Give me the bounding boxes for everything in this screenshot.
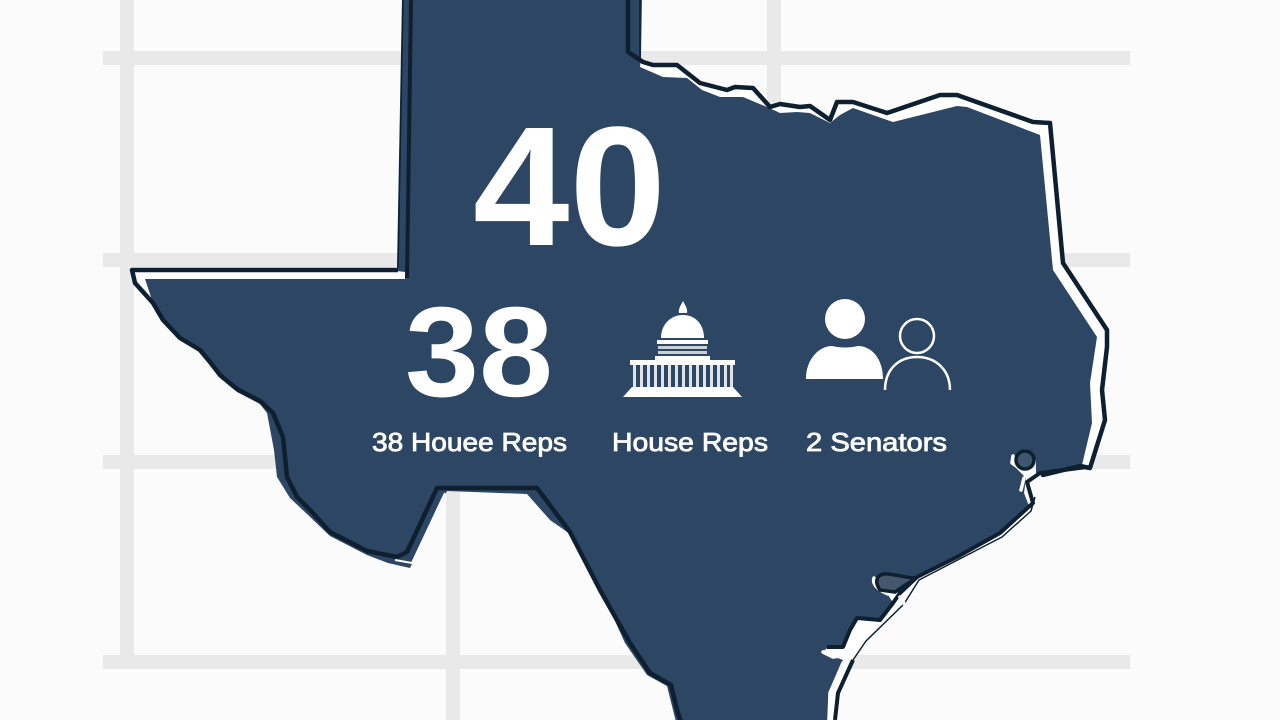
black border: panhandle east inner line <box>639 0 641 60</box>
black border: panhandle west lines <box>398 0 403 268</box>
label: House reps: House Reps <box>612 427 768 457</box>
black border: north and east <box>628 0 1107 475</box>
outlined senator <box>885 319 950 390</box>
black border: panhandle base and southwest <box>132 270 681 720</box>
filled senator <box>806 299 883 379</box>
black border: panhandle west thick line <box>407 0 411 278</box>
stat number: 38: 38 <box>405 281 553 424</box>
map: Texas silhouette <box>132 0 1107 720</box>
headline number: 40: 40 <box>473 92 666 282</box>
state fill <box>145 0 1097 720</box>
coast: Corpus Christi Bay loop <box>877 574 916 592</box>
coast: white highlights <box>823 456 1024 720</box>
white line: Big Bend <box>395 493 445 563</box>
coast: Galveston Bay loop <box>1016 451 1034 469</box>
coast: black shoreline <box>827 467 1087 720</box>
label: 38 House reps: 38 Houee Reps <box>372 427 567 457</box>
white offset band along borders <box>137 60 1107 720</box>
icon: two senators <box>806 299 950 390</box>
icon: capitol building <box>623 301 742 397</box>
label: 2 senators: 2 Senators <box>806 427 947 457</box>
coast: outer thin line <box>853 497 1035 660</box>
